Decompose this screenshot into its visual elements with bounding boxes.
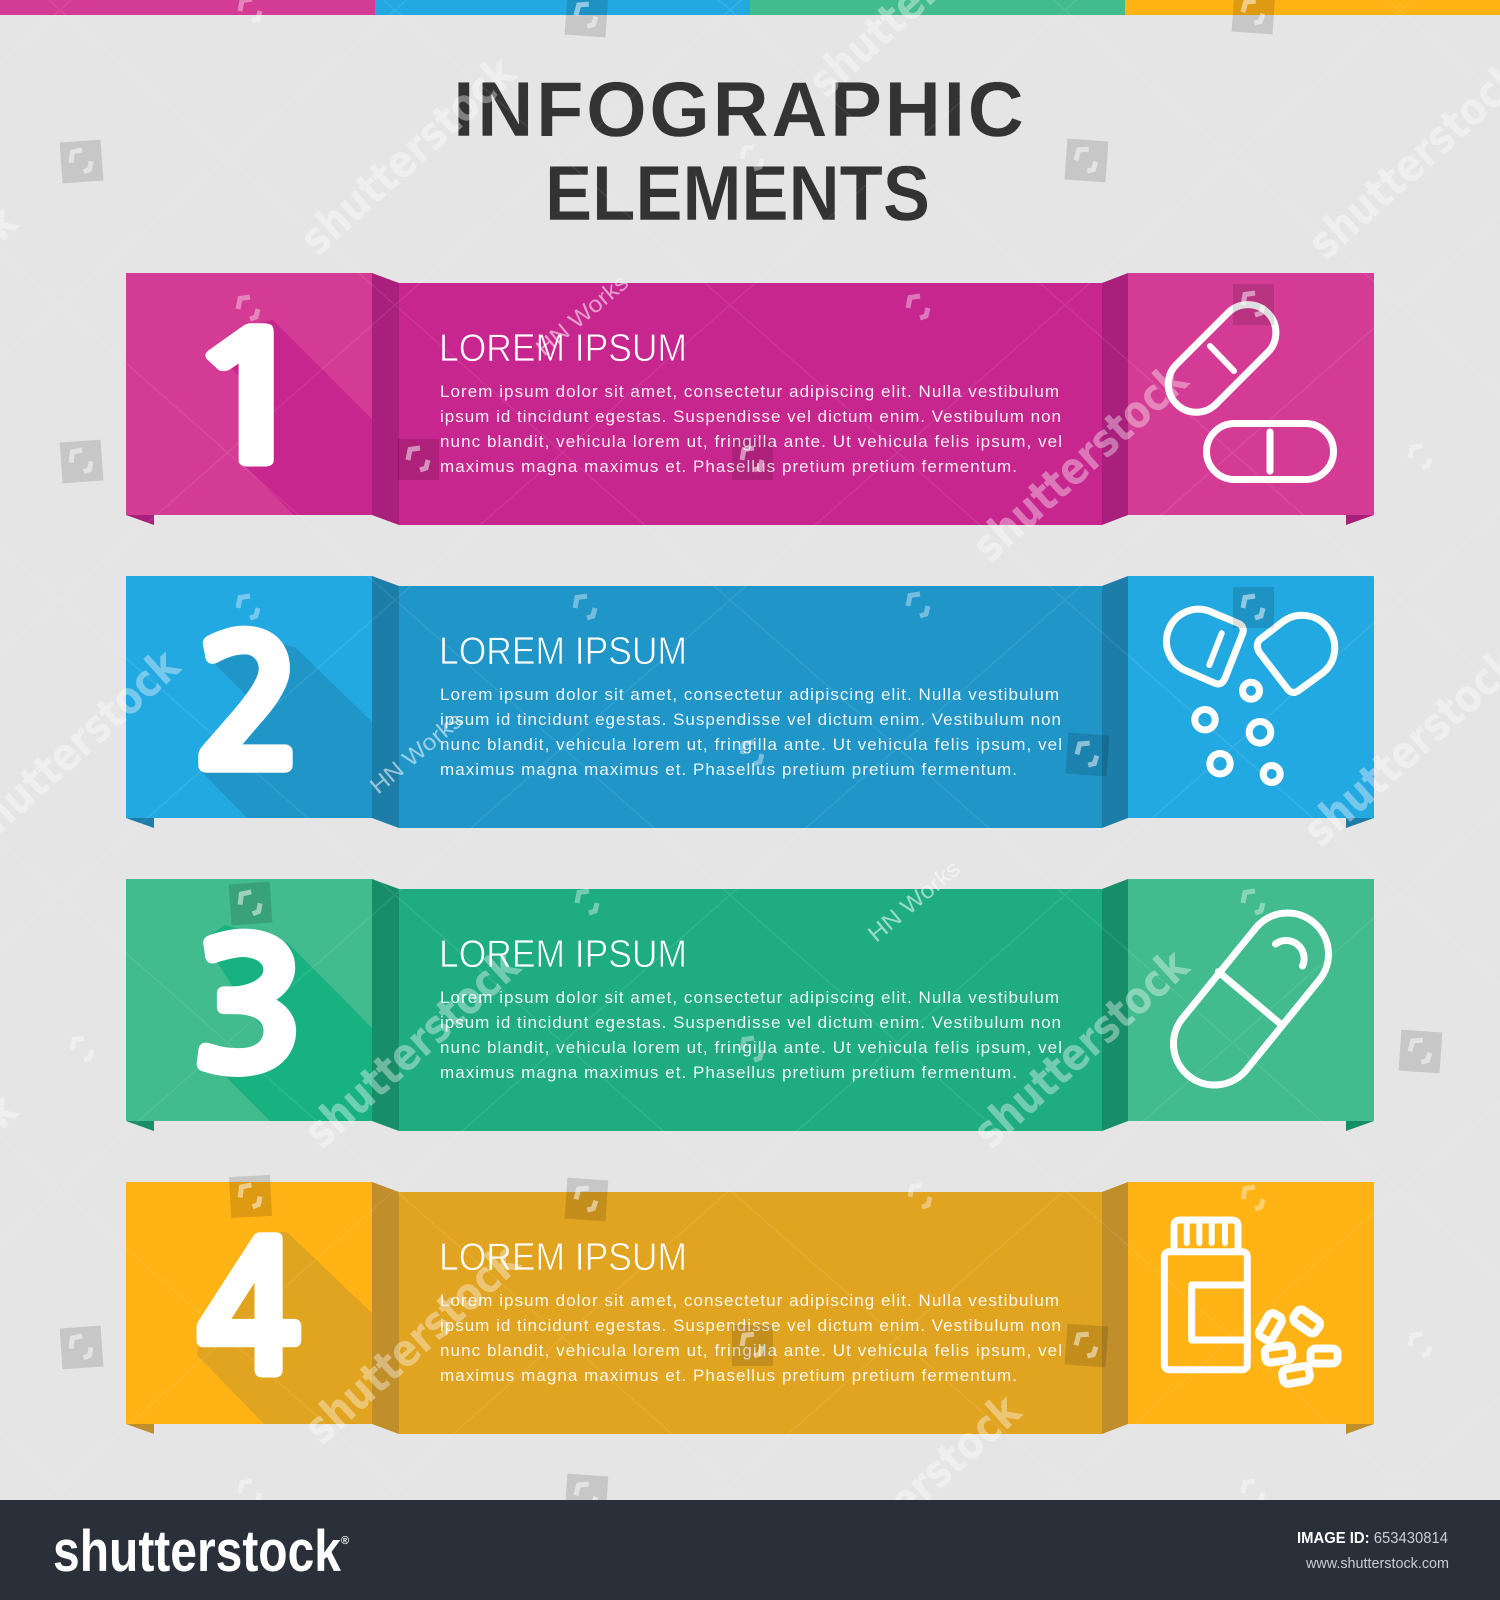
watermark: shutterstock overlays: shutterstock	[963, 938, 1199, 1159]
body text 2: ipsum id tincidunt egestas. Suspendisse vel dictum enim. Vestibulum non	[440, 710, 1061, 729]
body text 1: maximus magna maximus et. Phasellus pretium pretium fermentum.	[440, 457, 1017, 476]
heading 1: LOREM IPSUM	[439, 327, 687, 370]
watermark: shutterstock overlays: HN Works	[365, 707, 467, 799]
body text 1: ipsum id tincidunt egestas. Suspendisse vel dictum enim. Vestibulum non	[440, 407, 1061, 426]
panel: step 2	[126, 576, 1374, 828]
band: step 3 ribbon	[126, 879, 1374, 1131]
footer logo: shutterstock	[53, 1519, 342, 1584]
footer logo: ®	[341, 1535, 349, 1547]
watermark: shutterstock overlays: HN Works	[531, 269, 633, 361]
number 2 with long shadow	[193, 617, 372, 818]
body text 4: Lorem ipsum dolor sit amet, consectetur adipiscing elit. Nulla vestibulum	[440, 1291, 1059, 1310]
body text 3: nunc blandit, vehicula lorem ut, fringilla ante. Ut vehicula felis ipsum, vel	[440, 1038, 1062, 1057]
panel: step 3	[126, 879, 1374, 1131]
body text 1: Lorem ipsum dolor sit amet, consectetur adipiscing elit. Nulla vestibulum	[440, 382, 1059, 401]
watermark: shutterstock overlays: shutterstock	[795, 1383, 1031, 1600]
body text 4: maximus magna maximus et. Phasellus pretium pretium fermentum.	[440, 1366, 1017, 1385]
top colour bar	[0, 0, 1500, 15]
number 1 with long shadow: 1	[181, 312, 321, 489]
title: INFOGRAPHIC	[453, 65, 1024, 153]
body text 3: maximus magna maximus et. Phasellus pretium pretium fermentum.	[440, 1063, 1017, 1082]
number 4 with long shadow	[197, 1224, 372, 1424]
footer image id: IMAGE ID: 653430814	[1297, 1530, 1448, 1547]
icon: broken capsule with granules	[1167, 609, 1335, 782]
watermark: shutterstock overlays: shutterstock	[294, 1234, 530, 1455]
body text 3: Lorem ipsum dolor sit amet, consectetur adipiscing elit. Nulla vestibulum	[440, 988, 1059, 1007]
number 1 with long shadow	[181, 312, 372, 515]
heading 4: LOREM IPSUM	[439, 1236, 687, 1279]
watermark: shutterstock overlays: HN Works	[863, 855, 965, 947]
heading 3: LOREM IPSUM	[439, 933, 687, 976]
body text 1	[440, 382, 1062, 476]
title	[453, 65, 1024, 237]
body text 3	[440, 988, 1062, 1082]
body text 4	[440, 1291, 1062, 1385]
body text 2: nunc blandit, vehicula lorem ut, fringilla ante. Ut vehicula felis ipsum, vel	[440, 735, 1062, 754]
heading 2: LOREM IPSUM	[439, 630, 687, 673]
watermark: shutterstock overlays: shutterstock	[290, 45, 526, 266]
band: step 2 ribbon	[126, 576, 1374, 828]
title: ELEMENTS	[545, 149, 930, 237]
body text 3: ipsum id tincidunt egestas. Suspendisse vel dictum enim. Vestibulum non	[440, 1013, 1061, 1032]
footer url: www.shutterstock.com	[1305, 1555, 1449, 1572]
number 3 with long shadow	[191, 921, 372, 1121]
watermark: shutterstock overlays: shutterstock	[962, 352, 1198, 573]
panel: step 4	[126, 1182, 1374, 1434]
body text 2	[440, 685, 1062, 779]
body text 2: Lorem ipsum dolor sit amet, consectetur adipiscing elit. Nulla vestibulum	[440, 685, 1059, 704]
band: step 1 ribbon	[126, 273, 1374, 525]
icon: pill bottle with tablets	[1164, 1220, 1338, 1385]
watermark: shutterstock overlays: shutterstock	[294, 938, 530, 1159]
number 2 with long shadow: 2	[193, 617, 304, 794]
number 3 with long shadow: 3	[191, 921, 306, 1097]
number 4 with long shadow: 4	[197, 1224, 301, 1399]
icon: capsule	[1173, 913, 1328, 1085]
body text 1: nunc blandit, vehicula lorem ut, fringilla ante. Ut vehicula felis ipsum, vel	[440, 432, 1062, 451]
body text 4: nunc blandit, vehicula lorem ut, fringilla ante. Ut vehicula felis ipsum, vel	[440, 1341, 1062, 1360]
icon: two pills	[1157, 293, 1334, 480]
body text 2: maximus magna maximus et. Phasellus pretium pretium fermentum.	[440, 760, 1017, 779]
panel: step 1	[126, 273, 1374, 525]
body text 4: ipsum id tincidunt egestas. Suspendisse vel dictum enim. Vestibulum non	[440, 1316, 1061, 1335]
band: step 4 ribbon	[126, 1182, 1374, 1434]
footer bar	[0, 1500, 1500, 1600]
